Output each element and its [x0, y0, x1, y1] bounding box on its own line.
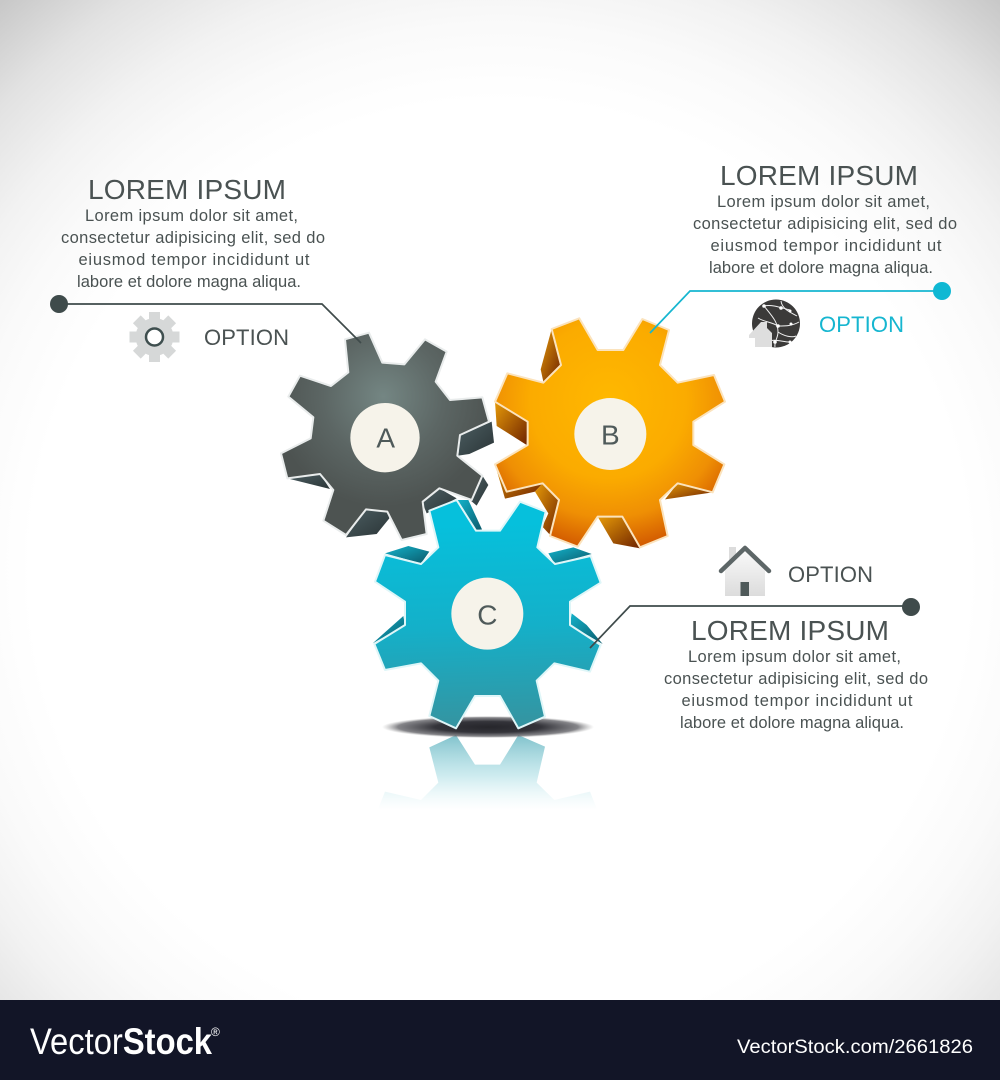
callout C line [590, 598, 920, 648]
gear B letter: B [601, 419, 620, 450]
heading A: LOREM IPSUM [88, 174, 286, 205]
option label B: OPTION [819, 312, 904, 337]
text block B [693, 160, 957, 277]
gear C side faces [373, 500, 603, 644]
gear A side faces [287, 422, 494, 537]
body C: labore et dolore magna aliqua. [680, 714, 904, 732]
option label A: OPTION [204, 325, 289, 350]
gear C face [374, 500, 601, 728]
gear C reflection [374, 735, 601, 818]
footer logo: VectorStock [30, 1021, 212, 1062]
body C: eiusmod tempor incididunt ut [682, 692, 913, 710]
gear C [373, 500, 603, 728]
ground shadow [382, 716, 594, 738]
callout A line [50, 295, 361, 343]
body B: Lorem ipsum dolor sit amet, [717, 193, 930, 211]
body A: Lorem ipsum dolor sit amet, [85, 207, 298, 225]
gear B [495, 318, 725, 548]
gear C hub [451, 578, 523, 650]
gear A hub [350, 403, 420, 472]
gear B face [495, 318, 725, 547]
body C [664, 648, 928, 732]
heading B: LOREM IPSUM [720, 160, 918, 191]
footer registered mark: ® [211, 1025, 220, 1039]
icon: gear [130, 312, 180, 362]
gear A letter: A [376, 422, 395, 453]
body B: labore et dolore magna aliqua. [709, 259, 933, 277]
gear B side faces [495, 329, 713, 548]
footer url: VectorStock.com/2661826 [737, 1037, 973, 1058]
text block C [664, 615, 928, 732]
body A: eiusmod tempor incididunt ut [78, 251, 310, 269]
option label C: OPTION [788, 562, 873, 587]
body B [693, 193, 957, 277]
icon: brain network head [749, 300, 800, 348]
body B: consectetur adipisicing elit, sed do [693, 215, 957, 233]
body A [61, 207, 325, 291]
gear A [281, 333, 494, 540]
icon: house [721, 547, 769, 596]
body A: consectetur adipisicing elit, sed do [61, 229, 325, 247]
gear A face [281, 333, 489, 540]
gear C letter: C [477, 599, 497, 630]
gear B hub [574, 398, 646, 470]
heading C: LOREM IPSUM [691, 615, 889, 646]
callout B line [650, 282, 951, 333]
body C: Lorem ipsum dolor sit amet, [688, 648, 901, 666]
body B: eiusmod tempor incididunt ut [710, 237, 942, 255]
text block A [61, 174, 325, 291]
footer bar [0, 1000, 1000, 1080]
body C: consectetur adipisicing elit, sed do [664, 670, 928, 688]
body A: labore et dolore magna aliqua. [77, 273, 301, 291]
